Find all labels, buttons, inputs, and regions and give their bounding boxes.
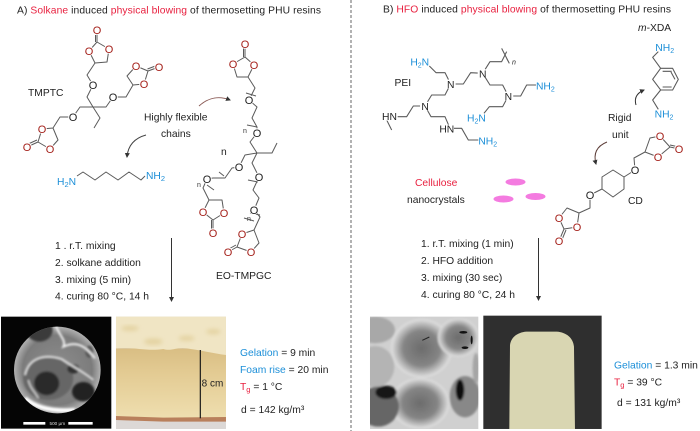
process steps A: 1 . r.T. mixing — [55, 241, 116, 252]
molecule: EO-TMPGC: O — [235, 162, 244, 174]
molecule: TMPTC: O — [69, 112, 78, 124]
molecule: hexamethylenediamine: 2 — [161, 174, 165, 183]
molecule: EO-TMPGC: O — [255, 172, 264, 184]
foam B properties: = 39 °C — [624, 378, 663, 388]
molecule: TMPTC: O — [23, 142, 32, 154]
process steps A: 3. mixing (5 min) — [55, 275, 131, 286]
molecule: EO-TMPGC: O — [199, 207, 208, 219]
process steps A: 4. curing 80 °C, 14 h — [55, 292, 149, 302]
molecule: CD: O — [675, 144, 684, 156]
molecule: PEI: HN — [439, 124, 454, 135]
process steps A — [55, 241, 149, 302]
label: highly flexible chains: chains — [161, 129, 191, 140]
label: cellulose nanocrystals — [407, 178, 465, 206]
foam B properties: T — [614, 378, 621, 388]
foam A properties: g — [246, 385, 250, 394]
molecule: m-XDA — [653, 43, 678, 121]
label: highly flexible chains: Highly flexible — [144, 112, 208, 124]
arrow to EO-TMPGC — [199, 98, 230, 106]
molecule: CD: O — [555, 213, 564, 225]
arrow to m-XDA — [635, 90, 644, 105]
molecule: PEI: N — [447, 80, 454, 91]
molecule: TMPTC: O — [140, 79, 149, 91]
panel: A solkane blowing — [1, 6, 329, 429]
photo: SEM foam A — [1, 317, 111, 429]
molecule: CD: O — [573, 222, 582, 234]
foam B properties: d = 131 kg/m³ — [617, 398, 681, 409]
molecule: CD: O — [586, 190, 595, 202]
molecule: PEI: 2 — [418, 62, 422, 69]
molecule: EO-TMPGC: O — [203, 174, 212, 186]
process steps B: 4. curing 80 °C, 24 h — [421, 290, 515, 301]
molecule: PEI: n — [512, 60, 516, 67]
process steps B: 1. r.T. mixing (1 min) — [421, 239, 514, 250]
molecule: m-XDA: 2 — [670, 48, 674, 55]
label: TMPTC: TMPTC — [28, 88, 64, 99]
molecule: CD — [554, 131, 684, 248]
molecule: hexamethylenediamine: NH — [146, 171, 161, 182]
molecule: hexamethylenediamine: N — [69, 177, 76, 188]
molecule: TMPTC: O — [38, 124, 47, 136]
molecule: CD: O — [555, 236, 564, 248]
label: rigid unit: unit — [612, 130, 629, 141]
icon: nanocrystals — [494, 178, 546, 202]
arrow: process A — [170, 238, 172, 301]
foam A properties — [240, 348, 329, 416]
molecule: PEI: H — [467, 113, 474, 124]
arrow: process B — [538, 238, 540, 300]
molecule: EO-TMPGC: O — [253, 128, 262, 140]
molecule: EO-TMPGC: O — [238, 229, 247, 241]
molecule: EO-TMPGC: n — [197, 182, 201, 189]
molecule: TMPTC: O — [46, 144, 55, 156]
molecule: EO-TMPGC: O — [241, 39, 250, 51]
molecule: EO-TMPGC: O — [224, 247, 233, 259]
molecule: EO-TMPGC: O — [250, 60, 259, 72]
molecule: CD: O — [656, 131, 665, 143]
molecule: PEI — [382, 48, 555, 149]
process steps B: 3. mixing (30 sec) — [421, 273, 502, 284]
molecule: CD: O — [631, 165, 640, 177]
molecule: PEI: N — [421, 102, 429, 113]
process steps B — [421, 239, 515, 301]
label: PEI: PEI — [394, 78, 411, 89]
foam B properties — [614, 360, 698, 409]
label: EO-TMPGC: EO-TMPGC — [216, 271, 272, 282]
molecule: PEI: 2 — [474, 118, 478, 125]
foam A properties: = 1 °C — [250, 382, 283, 393]
label: rigid unit: Rigid — [608, 113, 632, 124]
foam A properties: Gelation = 9 min — [240, 348, 316, 359]
label: cellulose nanocrystals: Cellulose — [415, 178, 458, 189]
label: highly flexible chains — [144, 112, 208, 140]
molecule: PEI: H — [410, 57, 418, 68]
heading A: A) Solkane induced physical blowing of thermosetting PHU resins — [17, 6, 321, 16]
foam A properties: Foam rise = 20 min — [240, 365, 329, 376]
photo: foam A with scale — [116, 317, 226, 429]
molecule: TMPTC: O — [132, 61, 141, 73]
molecule: PEI: N — [505, 92, 512, 103]
molecule: PEI: N — [479, 69, 486, 80]
label: m-XDA: m-XDA — [638, 23, 671, 34]
molecule: EO-TMPGC: O — [209, 228, 218, 240]
foam A properties: T — [240, 382, 247, 393]
molecule: EO-TMPGC: n — [243, 128, 247, 135]
molecule: TMPTC: O — [109, 92, 118, 104]
heading B: B) HFO induced physical blowing of thermosetting PHU resins — [383, 4, 671, 16]
panel: B HFO blowing — [355, 4, 698, 429]
molecule: TMPTC: O — [105, 44, 114, 56]
molecule: TMPTC: O — [89, 80, 98, 92]
molecule: EO-TMPGC: O — [247, 247, 256, 259]
arrow to diamine — [127, 135, 146, 157]
molecule: m-XDA: NH — [655, 109, 670, 120]
foam B properties: Gelation = 1.3 min — [614, 360, 698, 372]
molecule: EO-TMPGC: O — [250, 205, 259, 217]
molecule: PEI: 2 — [551, 86, 555, 93]
photo: foam A with scale: 8 cm — [202, 379, 223, 390]
molecule: TMPTC: O — [155, 62, 164, 74]
process steps B: 2. HFO addition — [421, 256, 493, 267]
molecule: EO-TMPGC — [197, 39, 277, 259]
panel divider — [350, 0, 352, 431]
molecule: PEI: NH — [478, 137, 493, 148]
process steps A: 2. solkane addition — [55, 258, 141, 269]
foam B properties: g — [620, 380, 624, 390]
molecule: EO-TMPGC: O — [229, 59, 238, 71]
molecule: EO-TMPGC: O — [220, 208, 229, 220]
photo: SEM foam B — [370, 316, 478, 429]
molecule: PEI: N — [478, 113, 486, 124]
arrow to CD — [595, 142, 607, 164]
molecule: hexamethylenediamine — [57, 171, 165, 189]
label: CD: CD — [628, 196, 643, 207]
molecule: hexamethylenediamine: 2 — [64, 180, 69, 189]
molecule: PEI: N — [422, 57, 429, 68]
molecule: PEI: NH — [536, 81, 551, 92]
molecule: CD: O — [654, 152, 663, 164]
molecule: EO-TMPGC: n — [247, 216, 251, 223]
molecule: TMPTC — [22, 25, 164, 156]
molecule: EO-TMPGC: O — [245, 95, 254, 107]
molecule: m-XDA: NH — [655, 43, 670, 54]
molecule: PEI: 2 — [493, 142, 497, 149]
molecule: hexamethylenediamine: H — [57, 177, 64, 188]
molecule: PEI: HN — [382, 112, 397, 123]
label: cellulose nanocrystals: nanocrystals — [407, 195, 465, 206]
molecule: TMPTC: O — [93, 25, 102, 37]
foam A properties: d = 142 kg/m³ — [241, 405, 305, 416]
molecule: EO-TMPGC: n — [221, 147, 227, 158]
label: rigid unit — [608, 113, 632, 141]
molecule: m-XDA: 2 — [670, 114, 674, 121]
photo: SEM foam A: 500 µm — [50, 421, 65, 426]
molecule: TMPTC: O — [85, 46, 94, 58]
photo: foam B sample — [483, 316, 602, 429]
